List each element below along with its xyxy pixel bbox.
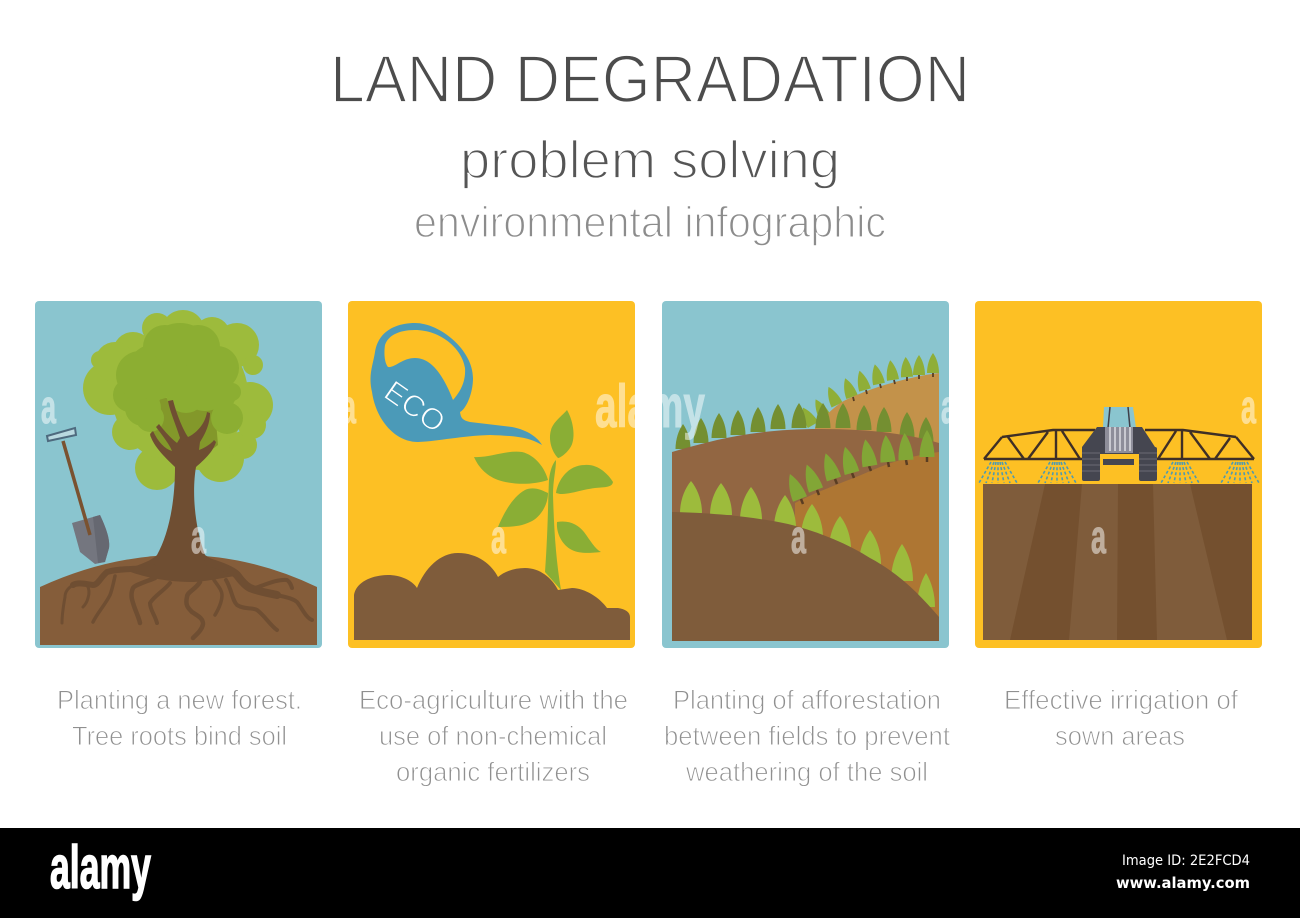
label on can: ECO: [378, 375, 451, 440]
text: eco caption: Eco-agriculture with the: [359, 685, 628, 715]
footer bar: [0, 828, 1300, 918]
text: afforestation caption: Planting of afforestation: [673, 685, 941, 715]
text: eco caption: [359, 685, 628, 787]
text: irrigation caption: sown areas: [1055, 721, 1185, 751]
subtitle: problem solving: [460, 131, 840, 190]
panel: new forest: [35, 301, 322, 648]
trunks: middle row: [801, 457, 927, 504]
trees: far row: [798, 353, 939, 428]
watermark: a: [941, 380, 956, 433]
middle hill: [795, 452, 939, 620]
text: afforestation caption: weathering of the soil: [685, 757, 928, 787]
icon: shovel: [47, 428, 109, 564]
watermark: a: [491, 510, 506, 563]
text: eco caption: organic fertilizers: [396, 757, 590, 787]
text: forest caption: [57, 685, 302, 751]
icon: soil mound: [40, 555, 317, 645]
watermark: a: [41, 380, 56, 433]
panel: irrigation: [975, 301, 1262, 648]
logo: alamy: [50, 834, 151, 901]
icon: spray nozzles: [979, 462, 1259, 483]
trees: back row: [676, 403, 934, 449]
trees: front row: [680, 481, 935, 607]
caption line: environmental infographic: [414, 198, 886, 247]
watermark: a: [191, 510, 206, 563]
icon: watering can: [370, 323, 542, 445]
watermark: alamy: [595, 373, 705, 440]
panel: eco agriculture: [348, 301, 635, 648]
icon: tree foliage: [83, 310, 273, 490]
watermark: a: [341, 380, 356, 433]
watermark: a: [791, 510, 806, 563]
image id: Image ID: 2E2FCD4: [1122, 853, 1250, 869]
title: LAND DEGRADATION: [330, 42, 970, 117]
text: irrigation caption: [1004, 685, 1238, 751]
front hill: [672, 512, 939, 641]
icon: plant: [474, 410, 613, 590]
text: afforestation caption: [664, 685, 950, 787]
trunks: far row: [853, 373, 933, 401]
site url: www.alamy.com: [1116, 874, 1250, 892]
text: forest caption: Tree roots bind soil: [72, 721, 287, 751]
watermark: a: [1091, 510, 1106, 563]
icon: roots: [62, 562, 312, 638]
field: [983, 484, 1252, 640]
icon: tractor: [1082, 407, 1157, 481]
icon: tree trunk: [125, 400, 242, 582]
icon: sprayer booms: [984, 430, 1254, 459]
text: eco caption: use of non-chemical: [379, 721, 607, 751]
watermark: a: [1241, 380, 1256, 433]
text: irrigation caption: Effective irrigation of: [1004, 685, 1238, 715]
icon: soil mounds: [354, 553, 630, 640]
watermark: [41, 373, 1256, 563]
far hill: [815, 373, 939, 445]
panel: afforestation: [662, 301, 949, 648]
text: forest caption: Planting a new forest.: [57, 685, 302, 715]
back hill: [672, 429, 939, 600]
text: afforestation caption: between fields to prevent: [664, 721, 950, 751]
trees: middle row: [783, 430, 934, 502]
